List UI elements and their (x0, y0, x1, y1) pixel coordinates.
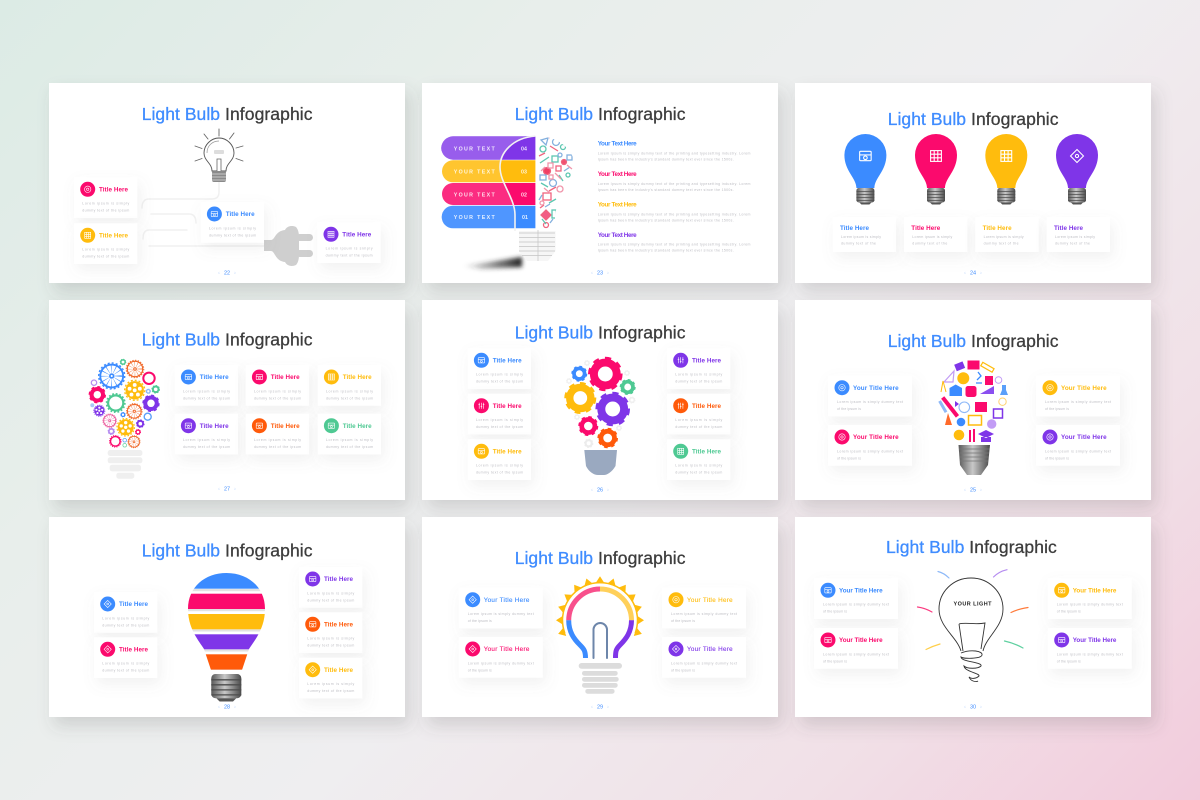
stacked bars: YOUR TEXT (454, 146, 495, 152)
card: blue: of the ipsum is (468, 619, 492, 623)
text blocks: Lorem Ipsum is simply dummy text of the printing and typesetting industry. Lorem (598, 242, 750, 246)
text blocks: Ipsum has been the industry's standard dummy text ever since the 1500s. (598, 218, 734, 222)
panel: slide 24 (795, 83, 1151, 283)
card: blue: Lorem ipsum is simply (841, 235, 881, 239)
panel: slide 29 (422, 517, 778, 717)
text blocks: Ipsum has been the industry's standard dummy text ever since the 1500s. (598, 188, 734, 192)
card: pink: dummy text of the (912, 242, 947, 246)
card: orange: Title Here (271, 423, 300, 430)
card: pink: Lorem ipsum is simply (912, 235, 953, 239)
card: yellow (1048, 578, 1132, 619)
page number: 27 (224, 486, 230, 492)
card: blue: Your Title Here (839, 587, 883, 594)
card: yellow: Lorem ipsum is simply (476, 464, 523, 468)
card: purple (1047, 217, 1110, 252)
card: yellow: of the ipsum is (671, 619, 695, 623)
card: blue (94, 592, 157, 633)
heading: Light Bulb (888, 109, 966, 129)
page number (218, 270, 236, 276)
card: purple: Title Here (200, 423, 229, 430)
page number (964, 704, 982, 710)
page number: 23 (597, 270, 603, 276)
card: purple: dummy text of the ipsum (307, 598, 354, 602)
card: green: Title Here (692, 449, 721, 456)
card: blue: dummy text of the ipsum (183, 396, 230, 400)
card: yellow: Title Here (99, 233, 128, 240)
card: yellow: of the ipsum is (1045, 407, 1069, 411)
icon: plug (264, 226, 313, 266)
card: pink: dummy text of the ipsum (82, 209, 129, 213)
card: yellow: of the ipsum is (1057, 610, 1081, 614)
card: purple: Your Title Here (1061, 434, 1107, 441)
text blocks: Ipsum has been the industry's standard dummy text ever since the 1500s. (598, 158, 734, 162)
doodle half of bulb (539, 135, 572, 228)
card: purple: Lorem ipsum is simply (1055, 235, 1095, 239)
card: purple: Lorem ipsum is simply (183, 438, 230, 442)
card: purple (317, 222, 381, 263)
card: pink: Lorem ipsum is simply (82, 202, 130, 206)
heading (886, 537, 1057, 557)
heading: Light Bulb (886, 537, 964, 557)
card: blue: of the ipsum is (837, 407, 861, 411)
card: purple: of the ipsum is (671, 668, 695, 672)
card: yellow (1036, 376, 1120, 416)
card: purple: Lorem ipsum is simply (675, 373, 723, 377)
heading: Infographic (225, 540, 313, 560)
page number: 28 (224, 704, 230, 710)
card: purple: Lorem ipsum is simply (307, 591, 355, 595)
card: pink (94, 637, 157, 678)
card: pink: Title Here (271, 374, 300, 381)
card: pink: Lorem ipsum is simply (254, 389, 301, 393)
page number: 29 (597, 704, 603, 710)
card: blue: dummy text of the ipsum (476, 380, 523, 384)
card: purple: Title Here (1054, 225, 1083, 232)
card: blue: Lorem ipsum is simply (476, 373, 523, 377)
card: pink (828, 425, 912, 466)
stacked bars: 03 (521, 170, 527, 176)
card: yellow (318, 365, 381, 406)
text blocks: Lorem Ipsum is simply dummy text of the printing and typesetting industry. Lorem (598, 152, 750, 156)
text blocks: Your Text Here (598, 171, 637, 178)
card: pink: Lorem ipsum is simply (476, 418, 523, 422)
heading (142, 330, 313, 350)
card: orange (667, 394, 730, 434)
card: green (667, 439, 730, 480)
card: blue: dummy text of the ipsum (209, 233, 256, 237)
icon: purple bulb (1056, 134, 1098, 204)
card: blue: dummy text of the ipsum (102, 623, 149, 627)
page number: › (607, 270, 609, 276)
card: pink: dummy text of the ipsum (254, 396, 301, 400)
page number: › (980, 270, 982, 276)
card: blue: Lorem ipsum is simply (183, 389, 230, 393)
card: yellow: dummy text of the (984, 242, 1019, 246)
bulb base (519, 230, 556, 261)
card: yellow (468, 439, 531, 480)
card: purple: of the ipsum is (1045, 456, 1069, 460)
page number: › (607, 488, 609, 494)
card: yellow: Lorem ipsum is simply (984, 235, 1024, 239)
page number: › (980, 704, 982, 710)
card: pink: Title Here (493, 403, 522, 410)
card: yellow: Your Title Here (1073, 587, 1117, 594)
wires (142, 182, 266, 246)
card: pink (74, 177, 137, 218)
card: yellow (662, 588, 746, 628)
card: yellow: Title Here (983, 225, 1012, 232)
page number: › (980, 488, 982, 494)
heading (142, 540, 313, 560)
card: blue (814, 578, 898, 619)
card: green: dummy text of the ipsum (326, 445, 373, 449)
card: purple (667, 348, 730, 389)
card: purple: Lorem ipsum is simply dummy text (671, 661, 737, 665)
big gear bulb (566, 358, 635, 475)
card: pink (904, 217, 967, 252)
text blocks: Your Text Here (598, 232, 637, 239)
stacked bars (441, 136, 536, 231)
card: pink: of the ipsum is (468, 668, 492, 672)
stacked bars: 02 (521, 192, 527, 198)
heading (888, 331, 1059, 351)
page number (964, 270, 982, 276)
card: yellow: dummy text of the ipsum (476, 471, 523, 475)
card: purple: Lorem ipsum is simply (326, 247, 373, 251)
card: purple: dummy text of the ipsum (326, 254, 373, 258)
card: purple (662, 637, 746, 678)
sketched bulb with rays: YOUR LIGHT (954, 602, 992, 608)
page number (964, 488, 982, 494)
icon: yellow bulb (985, 134, 1027, 204)
card: purple: Title Here (324, 576, 353, 583)
card: yellow: dummy text of the ipsum (326, 396, 373, 400)
card: yellow: Your Title Here (1061, 385, 1107, 392)
card: pink: of the ipsum is (837, 456, 861, 460)
card: yellow: Title Here (493, 449, 522, 456)
card: blue: Your Title Here (484, 597, 530, 604)
card: blue: Lorem ipsum is simply dummy text (837, 400, 903, 404)
page number: ‹ (964, 704, 966, 710)
card: yellow: Lorem ipsum is simply dummy text (671, 612, 737, 616)
card: purple: Your Title Here (1073, 637, 1117, 644)
page number: ‹ (218, 704, 220, 710)
card: blue: Lorem ipsum is simply dummy text (468, 612, 534, 616)
heading (515, 548, 686, 568)
panel: slide 22 (49, 83, 405, 283)
card: orange: Lorem ipsum is simply (254, 438, 301, 442)
heading: Infographic (225, 104, 313, 124)
text blocks (598, 140, 750, 252)
card: orange (246, 414, 309, 454)
card: blue: Title Here (226, 211, 255, 218)
panel: slide 30 (795, 517, 1151, 717)
panel: slide 26 (422, 300, 778, 500)
card: blue: of the ipsum is (823, 610, 847, 614)
page number (591, 488, 609, 494)
text blocks: Your Text Here (598, 140, 637, 148)
card: purple (175, 414, 238, 454)
card: pink: Title Here (119, 647, 148, 654)
heading (142, 104, 313, 124)
page number (591, 270, 609, 276)
card: yellow: Title Here (343, 374, 372, 381)
page number: 22 (224, 270, 230, 276)
card: yellow: Your Title Here (687, 597, 733, 604)
heading: Light Bulb (142, 540, 220, 560)
card: orange: Lorem ipsum is simply (675, 418, 723, 422)
card: blue (201, 202, 264, 243)
card: pink (246, 365, 309, 406)
heading: Light Bulb (515, 322, 593, 342)
card: yellow: dummy text of the ipsum (307, 689, 354, 693)
card: yellow: Title Here (324, 667, 353, 674)
page number (591, 704, 609, 710)
card: blue: Lorem ipsum is simply dummy text (823, 603, 889, 607)
heading: Infographic (598, 104, 686, 124)
card: blue: Title Here (840, 225, 869, 232)
card: pink: Title Here (99, 187, 128, 194)
card: green: Lorem ipsum is simply (326, 438, 373, 442)
card: purple: Your Title Here (687, 646, 733, 653)
page number: 26 (597, 488, 603, 494)
card: purple: dummy text of the ipsum (183, 445, 230, 449)
heading: Infographic (969, 537, 1057, 557)
heading: Light Bulb (515, 104, 593, 124)
striped bulb (188, 573, 265, 702)
card: pink: dummy text of the ipsum (476, 425, 523, 429)
card: purple: Title Here (342, 232, 372, 239)
page number: ‹ (964, 488, 966, 494)
card: pink: of the ipsum is (823, 659, 847, 663)
card: purple: Lorem ipsum is simply dummy text (1045, 449, 1111, 453)
card: pink: Your Title Here (853, 434, 899, 441)
card: purple (1036, 425, 1120, 466)
icon: pink bulb (915, 134, 957, 204)
card: pink: Lorem ipsum is simply (102, 662, 150, 666)
card: blue: Lorem ipsum is simply (209, 226, 256, 230)
page number: ‹ (591, 488, 593, 494)
card: green: dummy text of the ipsum (675, 471, 722, 475)
card: orange: dummy text of the ipsum (254, 445, 301, 449)
card: blue: Title Here (493, 357, 522, 364)
card: green: Lorem ipsum is simply (675, 464, 723, 468)
page number: ‹ (964, 270, 966, 276)
stacked bars: YOUR TEXT (454, 192, 495, 198)
stacked bars: YOUR TEXT (454, 170, 495, 176)
icon: outlined light bulb with rays (195, 129, 243, 182)
gear bulb (89, 359, 160, 479)
text blocks: Lorem Ipsum is simply dummy text of the printing and typesetting industry. Lorem (598, 182, 750, 186)
heading: Light Bulb (142, 104, 220, 124)
card: blue (468, 348, 531, 389)
heading: Infographic (225, 330, 313, 350)
card: yellow: Lorem ipsum is simply dummy text (1057, 603, 1123, 607)
card: orange: Title Here (324, 622, 353, 629)
card: orange (299, 612, 362, 653)
heading: Light Bulb (142, 330, 220, 350)
heading (515, 104, 686, 124)
page number: 24 (970, 270, 976, 276)
card: blue: dummy text of the (841, 242, 876, 246)
card: blue (833, 217, 896, 252)
page number: › (234, 704, 236, 710)
card: orange: Title Here (692, 403, 721, 410)
card: orange: Lorem ipsum is simply (307, 637, 355, 641)
page number (218, 486, 236, 492)
panel: slide 27 (49, 300, 405, 500)
card: blue: Title Here (200, 374, 229, 381)
stacked bars: YOUR TEXT (454, 215, 495, 221)
page number: › (234, 270, 236, 276)
panel: slide 23 (422, 83, 778, 283)
heading: Infographic (598, 548, 686, 568)
heading: Infographic (971, 109, 1059, 129)
card: green: Title Here (343, 423, 372, 430)
page number: 25 (970, 488, 976, 494)
page number: › (607, 704, 609, 710)
heading: Infographic (598, 322, 686, 342)
card: pink: Your Title Here (839, 637, 883, 644)
page number: 30 (970, 704, 976, 710)
card: blue (459, 588, 543, 628)
card: purple (1048, 628, 1132, 669)
card: pink: Title Here (911, 225, 941, 232)
card: purple: Title Here (692, 357, 721, 364)
card: purple: dummy text of the ipsum (675, 380, 722, 384)
card: pink (814, 628, 898, 669)
card: orange: dummy text of the ipsum (307, 644, 354, 648)
card: pink: Lorem ipsum is simply dummy text (837, 449, 903, 453)
card: pink: dummy text of the ipsum (102, 669, 149, 673)
panel: slide 28 (49, 517, 405, 717)
card: pink: Your Title Here (484, 646, 530, 653)
card: yellow (74, 223, 137, 264)
stacked bars: 01 (522, 215, 528, 221)
heading: Light Bulb (888, 331, 966, 351)
heading (888, 109, 1059, 129)
page number: ‹ (591, 704, 593, 710)
icon: blue bulb (844, 134, 886, 204)
heading: Light Bulb (515, 548, 593, 568)
card: blue (828, 376, 912, 416)
card: green (318, 414, 381, 454)
card: yellow (975, 217, 1039, 252)
text blocks: Lorem Ipsum is simply dummy text of the printing and typesetting industry. Lorem (598, 212, 750, 216)
card: yellow: Lorem ipsum is simply (82, 248, 130, 252)
page number: › (234, 486, 236, 492)
card: purple: Lorem ipsum is simply dummy text (1057, 652, 1123, 656)
education icon bulb (938, 360, 1008, 475)
sketched bulb with rays (918, 570, 1028, 682)
card: purple: dummy text of the (1055, 242, 1090, 246)
card: purple: of the ipsum is (1057, 659, 1081, 663)
card: blue: Your Title Here (853, 385, 899, 392)
stacked bars: 04 (521, 146, 527, 152)
card: blue: Lorem ipsum is simply (102, 616, 150, 620)
card: yellow: Lorem ipsum is simply (326, 389, 373, 393)
card: pink (468, 394, 531, 434)
sun bulb (556, 576, 644, 694)
card: yellow: dummy text of the ipsum (82, 255, 129, 259)
panel: slide 25 (795, 300, 1151, 500)
card: blue (175, 365, 238, 406)
page number: ‹ (218, 270, 220, 276)
card: pink: Lorem ipsum is simply dummy text (823, 652, 889, 656)
heading: Infographic (971, 331, 1059, 351)
text blocks: Your Text Here (598, 202, 637, 208)
text blocks: Ipsum has been the industry's standard dummy text ever since the 1500s. (598, 248, 734, 252)
page number: ‹ (591, 270, 593, 276)
bulb shadow (462, 257, 522, 269)
card: yellow: Lorem ipsum is simply dummy text (1045, 400, 1111, 404)
page number (218, 704, 236, 710)
heading (515, 322, 686, 342)
card: purple (299, 567, 362, 608)
card: orange: dummy text of the ipsum (675, 425, 722, 429)
card: yellow (299, 658, 362, 698)
card: pink: Lorem ipsum is simply dummy text (468, 661, 534, 665)
page number: ‹ (218, 486, 220, 492)
card: blue: Title Here (119, 601, 148, 608)
card: pink (459, 637, 543, 678)
card: yellow: Lorem ipsum is simply (307, 682, 355, 686)
